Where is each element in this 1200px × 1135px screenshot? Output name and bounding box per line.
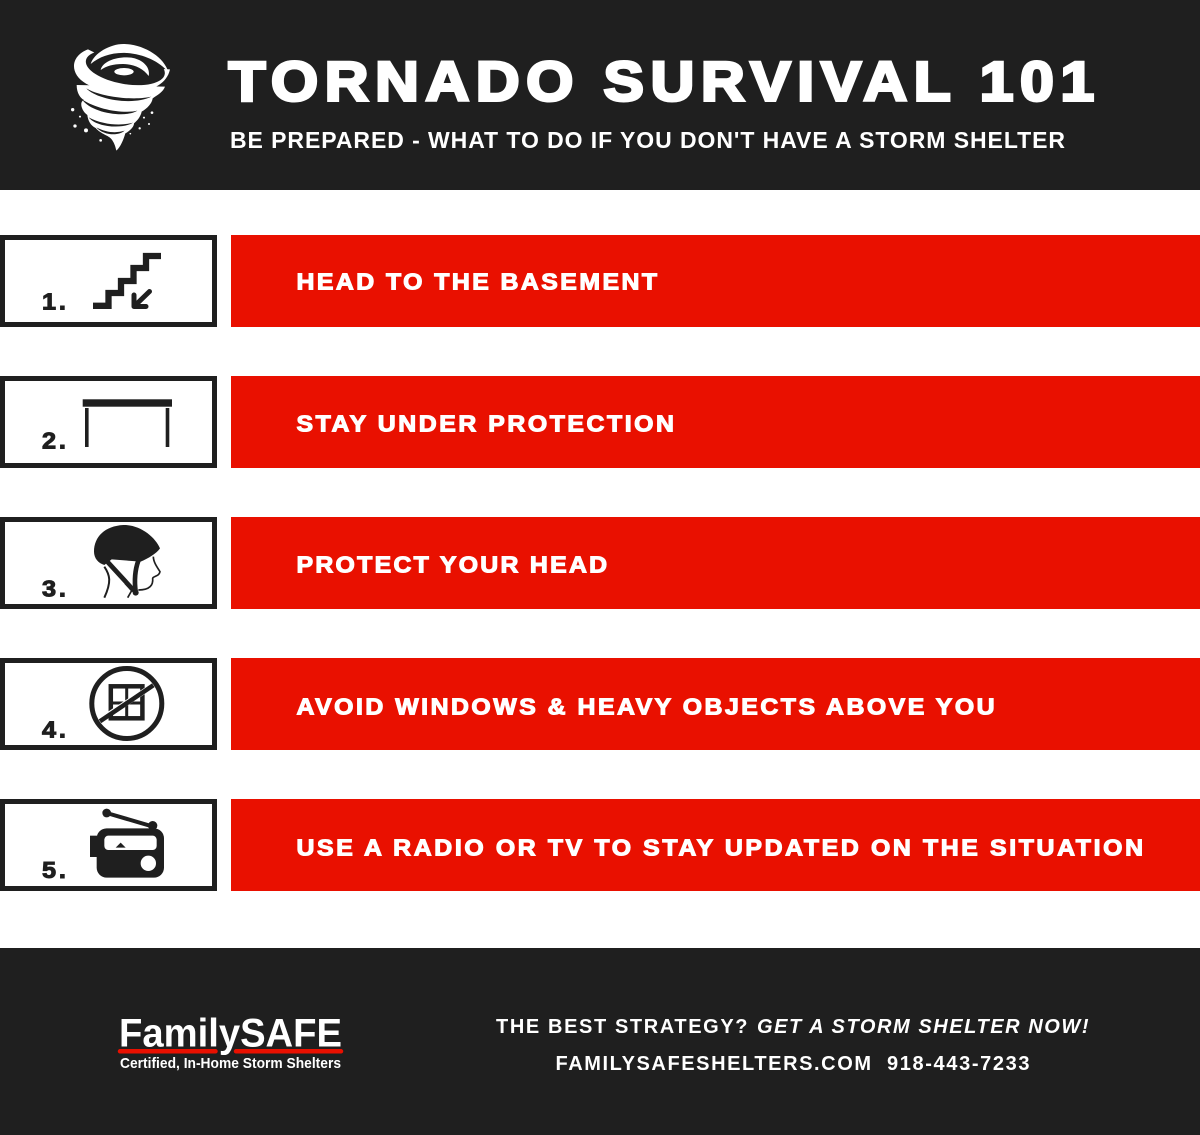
icon frame 5 (2, 802, 214, 888)
icon frame 4 (2, 660, 214, 748)
contact details: 918-443-7233 (887, 1053, 1030, 1075)
logo: FamilySAFE: FamilySAFE (119, 1012, 342, 1056)
step 2 (2, 376, 1200, 468)
icon: tornado (71, 44, 170, 151)
icon: helmet on head (94, 525, 160, 598)
call to action (496, 1016, 1089, 1038)
icon frame 1 (2, 238, 214, 324)
icon frame 2 (2, 378, 214, 466)
step 5 (2, 799, 1200, 891)
number 5: 5. (42, 858, 69, 884)
step 3 (2, 517, 1200, 609)
number 2: 2. (42, 429, 69, 454)
number 1: 1. (42, 290, 69, 315)
call to action: GET A STORM SHELTER NOW! (757, 1016, 1089, 1038)
number 3: 3. (42, 577, 69, 602)
logo: FamilySAFE: Certified, In-Home Storm Shelters (120, 1055, 341, 1072)
icon: stairs with arrow (93, 256, 161, 306)
icon: table (83, 399, 172, 447)
banner 1 (231, 235, 1200, 327)
banner 5 (231, 799, 1200, 891)
icon frame 3 (2, 520, 214, 606)
contact details: FAMILYSAFESHELTERS.COM (556, 1053, 871, 1075)
banner text 2: STAY UNDER PROTECTION (296, 411, 674, 437)
banner 3 (231, 517, 1200, 609)
footer band (0, 948, 1200, 1135)
icon: no windows (92, 668, 162, 738)
banner text 1: HEAD TO THE BASEMENT (296, 269, 657, 295)
title: TORNADO SURVIVAL 101 (228, 51, 1094, 113)
step 1 (2, 235, 1200, 327)
banner text 3: PROTECT YOUR HEAD (296, 552, 607, 578)
banner text 4: AVOID WINDOWS & HEAVY OBJECTS ABOVE YOU (296, 694, 995, 720)
header band (0, 0, 1200, 190)
step 4 (2, 658, 1200, 750)
banner 4 (231, 658, 1200, 750)
subtitle: BE PREPARED - WHAT TO DO IF YOU DON'T HAVE A STORM SHELTER (230, 127, 1065, 153)
banner text 5: USE A RADIO OR TV TO STAY UPDATED ON THE SITUATION (296, 835, 1143, 861)
number 4: 4. (42, 718, 69, 743)
call to action: THE BEST STRATEGY? (496, 1016, 748, 1038)
icon: radio (90, 809, 164, 878)
banner 2 (231, 376, 1200, 468)
contact details (556, 1053, 1030, 1075)
